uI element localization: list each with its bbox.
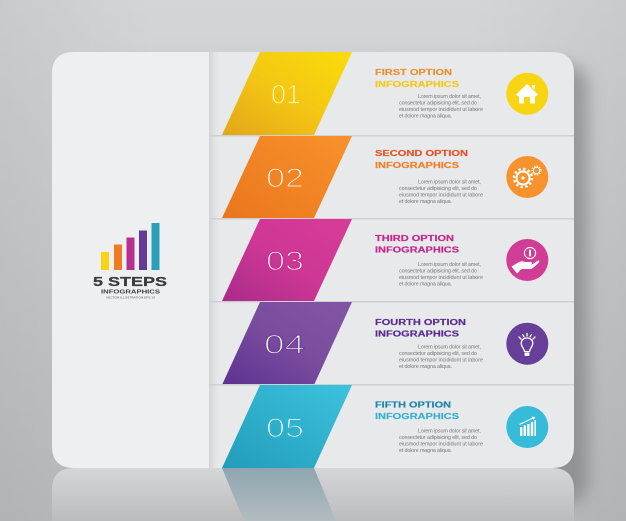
body text [399, 428, 483, 454]
step 2 [209, 135, 574, 218]
heading: FIFTH OPTION [375, 400, 451, 410]
body text: eiusmod tempor incididunt ut labore [399, 107, 483, 113]
heading [375, 233, 459, 254]
ribbon [222, 136, 352, 218]
body text: consectetur adipisicing elit, sed do [399, 268, 477, 274]
body text: et dolore magna aliqua. [399, 282, 452, 288]
heading [375, 148, 468, 170]
body text: et dolore magna aliqua. [399, 114, 452, 120]
body text: consectetur adipisicing elit, sed do [399, 100, 477, 106]
body text: Lorem ipsum dolor sit amet, [418, 428, 482, 434]
step 4 [209, 301, 574, 385]
body text: consectetur adipisicing elit, sed do [399, 351, 477, 357]
step 3 [209, 218, 574, 301]
body text: eiusmod tempor incididunt ut labore [399, 358, 483, 364]
ribbon [222, 219, 352, 301]
row background [209, 302, 574, 384]
heading [375, 317, 466, 338]
body text: eiusmod tempor incididunt ut labore [399, 275, 483, 281]
body text: Lorem ipsum dolor sit amet, [418, 344, 482, 350]
body text [399, 344, 483, 370]
body text: eiusmod tempor incididunt ut labore [399, 442, 483, 448]
heading: INFOGRAPHICS [375, 160, 459, 170]
step 1 [209, 52, 574, 135]
body text: Lorem ipsum dolor sit amet, [418, 94, 482, 100]
row background [209, 52, 574, 135]
ribbon [222, 52, 352, 135]
icon: light bulb [506, 323, 548, 365]
heading: INFOGRAPHICS [375, 411, 459, 421]
logo title: 5 STEPS [93, 274, 167, 289]
body text: Lorem ipsum dolor sit amet, [418, 262, 482, 268]
logo caption: VECTOR ILLUSTRATION EPS 10 [106, 296, 155, 300]
row background [209, 219, 574, 301]
number: 02 [266, 163, 304, 193]
ribbon [222, 385, 352, 468]
body text [399, 94, 483, 120]
body text: et dolore magna aliqua. [399, 364, 452, 370]
logo: 5 steps [93, 223, 167, 300]
row background [209, 136, 574, 218]
heading: FOURTH OPTION [375, 317, 466, 327]
icon: gears [506, 156, 548, 198]
body text: et dolore magna aliqua. [399, 199, 452, 205]
heading: THIRD OPTION [375, 233, 454, 243]
body text: et dolore magna aliqua. [399, 448, 452, 454]
logo subtitle: INFOGRAPHICS [101, 290, 160, 296]
floor reflection [52, 468, 574, 521]
body text [399, 180, 483, 205]
heading [375, 400, 459, 421]
ribbon [222, 302, 352, 385]
body text [399, 262, 483, 288]
body text: consectetur adipisicing elit, sed do [399, 435, 477, 441]
body text: Lorem ipsum dolor sit amet, [418, 180, 482, 186]
heading: SECOND OPTION [375, 148, 468, 158]
number: 04 [264, 330, 305, 360]
number: 01 [271, 80, 301, 110]
row background [209, 385, 574, 468]
heading: INFOGRAPHICS [375, 244, 459, 254]
number: 05 [266, 413, 304, 443]
heading [375, 67, 459, 89]
heading: INFOGRAPHICS [375, 328, 459, 338]
step 5 [209, 384, 574, 468]
icon: growth chart [506, 406, 548, 448]
icon: house [506, 73, 548, 115]
left panel [52, 52, 209, 468]
number: 03 [266, 246, 304, 276]
body text: eiusmod tempor incididunt ut labore [399, 192, 483, 198]
logo bar chart [101, 223, 160, 270]
icon: hand holding coin [506, 239, 548, 281]
heading: FIRST OPTION [375, 67, 452, 77]
heading: INFOGRAPHICS [375, 79, 459, 89]
panel shadow [80, 64, 588, 504]
body text: consectetur adipisicing elit, sed do [399, 186, 477, 192]
